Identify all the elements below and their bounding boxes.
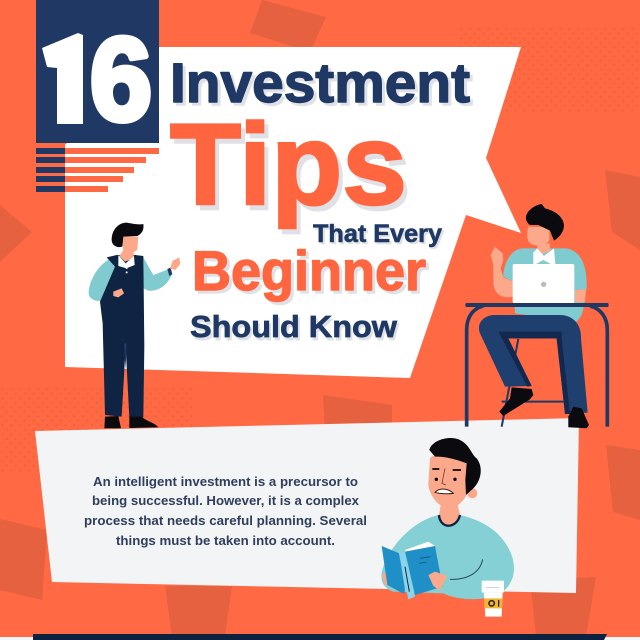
illustration: standing man bbox=[89, 223, 180, 428]
title: That Every: That Every bbox=[313, 220, 442, 248]
title: Investment: Investment bbox=[170, 51, 470, 114]
text block: introduction: process that needs careful planning. Several bbox=[84, 514, 367, 528]
title: Should Know: Should Know bbox=[192, 312, 400, 347]
illustration: man at laptop desk bbox=[465, 204, 609, 428]
illustration: man reading book bbox=[381, 438, 514, 617]
title: Beginner: Beginner bbox=[192, 239, 426, 302]
panel: intro text box bbox=[35, 418, 579, 593]
text block: introduction bbox=[84, 475, 367, 548]
text block: introduction: An intelligent investment is a precursor to bbox=[93, 475, 358, 489]
panel: white speech bubble bbox=[65, 47, 521, 378]
title: Beginner: Beginner bbox=[195, 242, 429, 305]
text block: introduction: things must be taken into account. bbox=[116, 534, 335, 548]
decorative stripes under badge bbox=[36, 148, 159, 192]
badge: 16 navy box: 1 bbox=[45, 16, 85, 148]
title: Tips: Tips bbox=[170, 101, 407, 229]
title: Tips: Tips bbox=[174, 106, 411, 234]
badge: 16 navy box: 6 bbox=[90, 14, 152, 146]
title: That Every: That Every bbox=[315, 222, 444, 250]
text block: introduction: being successful. However, it is a complex bbox=[92, 494, 359, 508]
footer: dark band bbox=[0, 634, 640, 640]
badge: 16 navy box bbox=[36, 0, 159, 148]
title: Should Know: Should Know bbox=[190, 309, 398, 344]
title: Investment: Investment bbox=[173, 54, 473, 117]
